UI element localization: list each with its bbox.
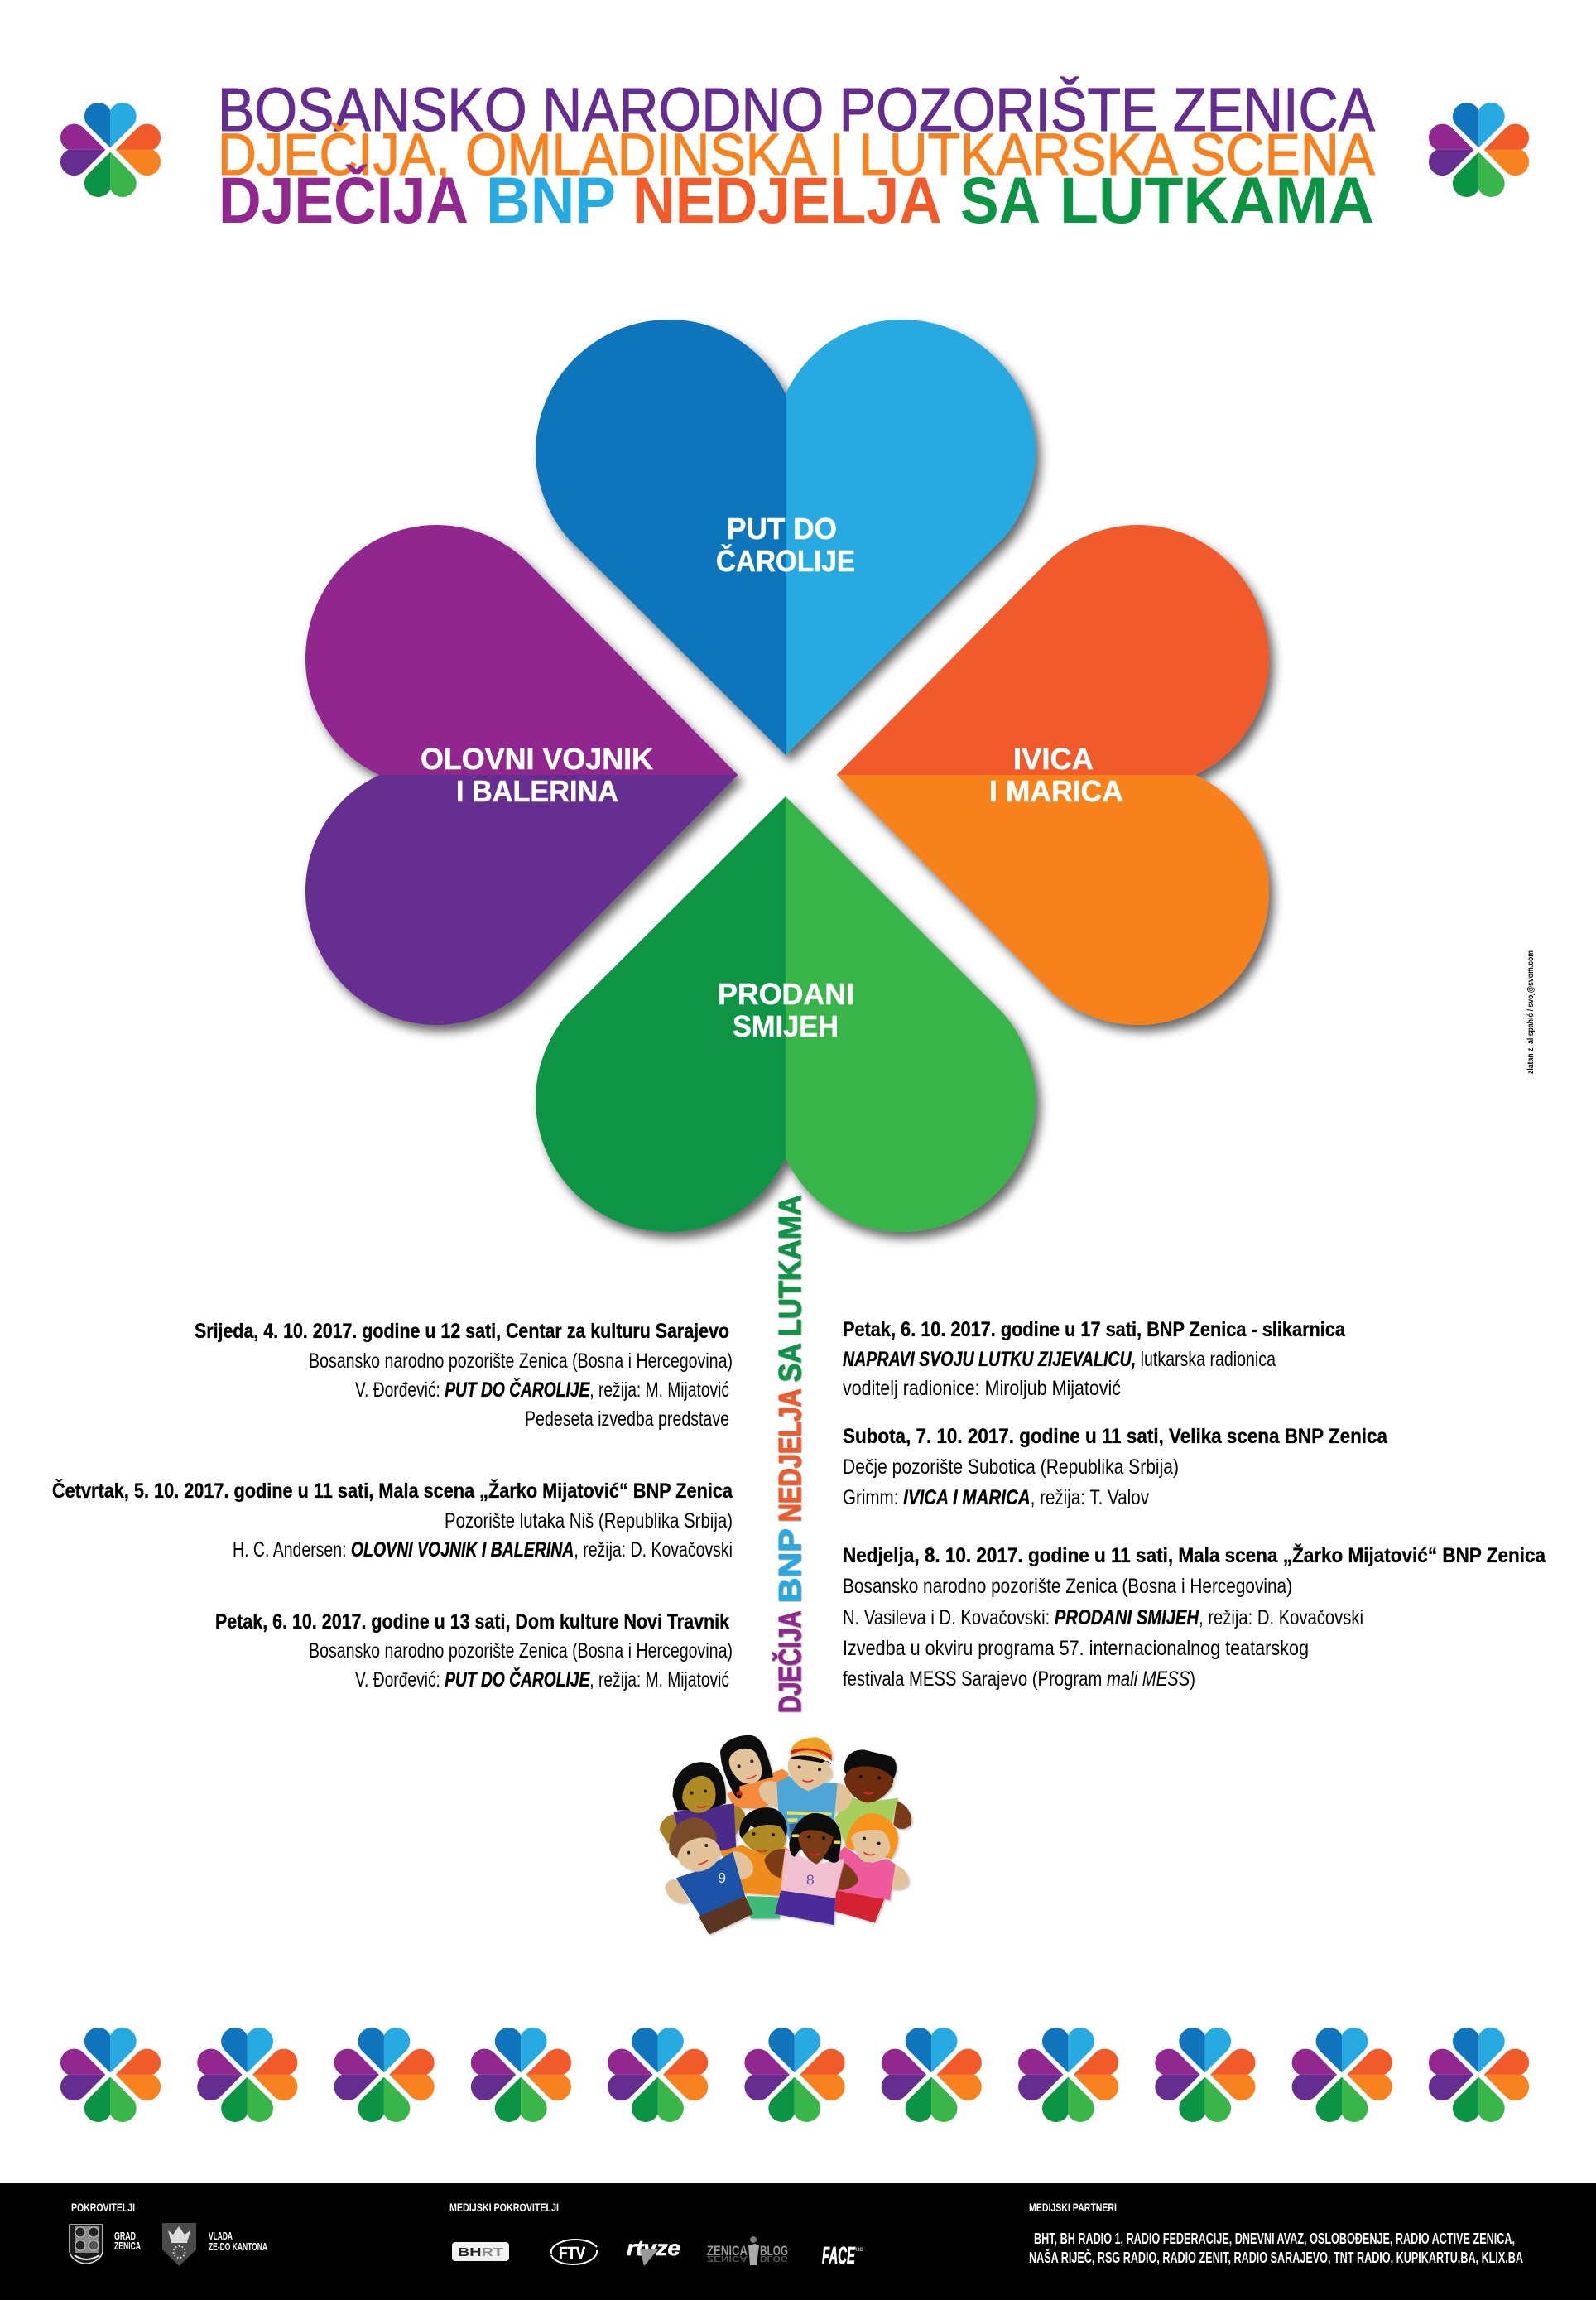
puppet: purple shirt [660, 1762, 745, 1852]
event: Petak 6.10. Novi Travnik: V. Đorđević: PUT DO ČAROLIJE, režija: M. Mijatović [355, 1667, 729, 1691]
event: Subota 7.10. [843, 1425, 1388, 1509]
icon: Vlada ZE-DO shield [162, 2223, 196, 2266]
event: Nedjelja 8.10.: Izvedba u okviru programa 57. internacionalnog teatarskog [843, 1637, 1309, 1660]
label: Ivica i Marica: IVICA [1013, 742, 1094, 776]
label: Grad Zenica [114, 2230, 141, 2252]
event: Nedjelja 8.10.: festivala MESS Sarajevo (Program mali MESS) [843, 1667, 1195, 1691]
event: Četvrtak 5.10.: Pozorište lutaka Niš (Republika Srbija) [445, 1509, 733, 1533]
event: Srijeda 4.10.: Pedeseta izvedba predstave [525, 1407, 729, 1431]
heading: media partners: MEDIJSKI PARTNERI [1029, 2201, 1117, 2214]
event: Srijeda 4.10.: Bosansko narodno pozorište Zenica (Bosna i Hercegovina) [309, 1350, 733, 1373]
event: Petak 6.10. Novi Travnik [215, 1610, 733, 1691]
vertical stem title: LUTKAMA [773, 1195, 808, 1336]
footer bar [0, 2183, 1596, 2300]
logo: Face: HD [856, 2248, 863, 2253]
vertical stem title: DJEČIJA [771, 1610, 808, 1713]
logo: Zenica blog: BLOG [760, 2243, 788, 2259]
event: Petak 6.10. slikarnica [843, 1318, 1346, 1400]
label: Put do čarolije: ČAROLIJE [716, 543, 855, 578]
illustration: hand puppets [660, 1735, 911, 1935]
title line 3 [219, 163, 1374, 237]
event: Nedjelja 8.10.: Bosansko narodno pozorište Zenica (Bosna i Hercegovina) [843, 1575, 1292, 1598]
logo: Face: FACE [822, 2243, 856, 2269]
logo: Zenica blog [707, 2236, 788, 2265]
logo: Face [822, 2243, 863, 2269]
logo: Zenica blog: BLOG [760, 2254, 788, 2264]
title line 1: BOSANSKO NARODNO POZORIŠTE ZENICA [218, 75, 1376, 144]
event: Četvrtak 5.10. [52, 1478, 733, 1561]
label: Olovni vojnik i balerina: I BALERINA [456, 774, 618, 808]
puppet: girl with orange shirt [720, 1735, 789, 1809]
puppet: dark boy with green shirt [834, 1749, 911, 1849]
petal: Ivica i Marica [837, 525, 1269, 1025]
label: Ivica i Marica [989, 742, 1123, 808]
panel: schedule right [843, 1318, 1546, 1691]
event: Srijeda 4.10.: V. Đorđević: PUT DO ČAROLIJE, režija: M. Mijatović [355, 1377, 729, 1402]
panel: schedule left [52, 1320, 733, 1691]
title line 3: DJEČIJA [219, 163, 469, 237]
title line 3: NEDJELJA [632, 163, 942, 237]
puppet: girl with number 8: 8 [806, 1872, 815, 1889]
heading: media sponsors: MEDIJSKI POKROVITELJI [449, 2201, 559, 2214]
logo: RTV ZE: rtvze [627, 2235, 680, 2260]
logo: BHRT [452, 2242, 509, 2261]
event: Nedjelja 8.10.: N. Vasileva i D. Kovačovski: PRODANI SMIJEH, režija: D. Kovačovski [843, 1606, 1363, 1629]
event: Petak 6.10. slikarnica: Petak, 6. 10. 2017. godine u 17 sati, BNP Zenica - slikarnica [843, 1318, 1346, 1341]
puppet: blonde girl with pink shirt [834, 1813, 909, 1922]
label: Prodani smijeh [718, 977, 854, 1043]
title [218, 75, 1376, 237]
petal: Prodani smijeh [536, 796, 1036, 1232]
logo: Zenica blog: ZENICA [707, 2243, 748, 2259]
title line 2: DJEČIJA, OMLADINSKA I LUTKARSKA SCENA [218, 123, 1376, 188]
title line 3: BNP [486, 163, 616, 237]
event: Petak 6.10. slikarnica: voditelj radionice: Miroljub Mijatović [843, 1377, 1121, 1400]
vertical stem title: NEDJELJA [773, 1388, 808, 1522]
event: Nedjelja 8.10. [843, 1542, 1546, 1691]
puppet: boy with cap and blue shirt [759, 1737, 852, 1846]
event: Petak 6.10. slikarnica: NAPRAVI SVOJU LUTKU ZIJEVALICU, lutkarska radionica [843, 1348, 1276, 1371]
label: Vlada ZE-DO kantona [209, 2230, 267, 2253]
label: Vlada ZE-DO kantona: VLADA [209, 2230, 233, 2242]
icon: header flower right [1429, 103, 1529, 197]
event: Srijeda 4.10.: Srijeda, 4. 10. 2017. godine u 12 sati, Centar za kulturu Sarajevo [195, 1320, 729, 1343]
label: Put do čarolije: PUT DO [727, 512, 837, 546]
event: Subota 7.10.: Grimm: IVICA I MARICA, režija: T. Valov [843, 1486, 1149, 1509]
label: Olovni vojnik i balerina [421, 742, 653, 808]
label: Grad Zenica: ZENICA [114, 2240, 141, 2252]
petal: Olovni vojnik i balerina [305, 525, 738, 1025]
icon: header flower left [60, 103, 161, 197]
event: Četvrtak 5.10.: Četvrtak, 5. 10. 2017. godine u 11 sati, Mala scena „Žarko Mijatović“ BNP Zenica [52, 1478, 733, 1503]
vertical stem title [771, 1195, 808, 1713]
label: Ivica i Marica: I MARICA [989, 774, 1123, 808]
puppet: girl with number 8 [764, 1813, 858, 1925]
event: Petak 6.10. Novi Travnik: Bosansko narodno pozorište Zenica (Bosna i Hercegovina) [309, 1639, 733, 1662]
puppet: boy with orange shirt [720, 1807, 792, 1918]
flower row [60, 2028, 1529, 2122]
event: Subota 7.10.: Dečje pozorište Subotica (Republika Srbija) [843, 1456, 1179, 1479]
event: Srijeda 4.10. [195, 1320, 733, 1431]
text: media partners list [1029, 2230, 1523, 2266]
event: Četvrtak 5.10.: H. C. Andersen: OLOVNI VOJNIK I BALERINA, režija: D. Kovačovski [233, 1538, 733, 1561]
label: Prodani smijeh: SMIJEH [733, 1009, 839, 1043]
label: Prodani smijeh: PRODANI [718, 977, 854, 1011]
logo: FTV [551, 2240, 597, 2264]
vertical stem title: SA [773, 1343, 808, 1382]
logo: Zenica blog: ZENICA [707, 2254, 748, 2264]
puppet: boy with number 9 [665, 1817, 753, 1935]
title line 3: SA [960, 163, 1041, 237]
title line 3: LUTKAMA [1060, 163, 1374, 237]
puppet: boy with number 9: 9 [718, 1869, 726, 1886]
label: Vlada ZE-DO kantona: ZE-DO KANTONA [209, 2240, 267, 2253]
event: Subota 7.10.: Subota, 7. 10. 2017. godine u 11 sati, Velika scena BNP Zenica [843, 1425, 1388, 1448]
icon: Grad Zenica shield [70, 2225, 103, 2264]
logo: BHRT: BH RT [458, 2245, 503, 2259]
logo: FTV: FTV [559, 2245, 586, 2263]
heading: sponsors: POKROVITELJI [71, 2201, 135, 2214]
label: Put do čarolije [716, 512, 855, 578]
flower chart [305, 320, 1269, 1232]
vertical stem title: BNP [773, 1528, 808, 1603]
label: Grad Zenica: GRAD [114, 2230, 136, 2242]
credit: vertical author line: zlatan z. alispahić / svoj@svom.com [1526, 950, 1536, 1074]
label: Olovni vojnik i balerina: OLOVNI VOJNIK [421, 742, 653, 776]
event: Petak 6.10. Novi Travnik: Petak, 6. 10. 2017. godine u 13 sati, Dom kulture Novi Travnik [215, 1610, 729, 1634]
petal: Put do čarolije [536, 320, 1036, 755]
